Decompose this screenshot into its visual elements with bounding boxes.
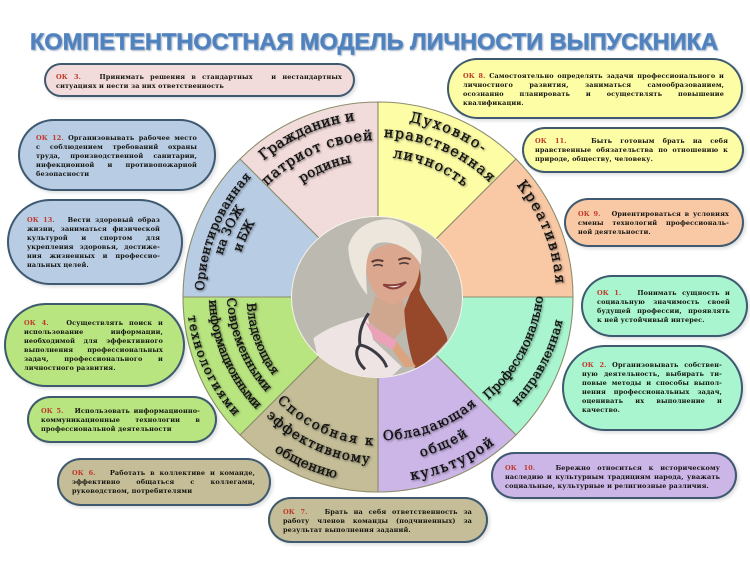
title: КОМПЕТЕНТНОСТНАЯ МОДЕЛЬ ЛИЧНОСТИ ВЫПУСКНИКА bbox=[30, 28, 718, 54]
callout: OK 12: с соблюдением требований охраны bbox=[36, 142, 197, 150]
callout: OK 1: к ней устойчивый интерес. bbox=[597, 316, 705, 324]
callout: OK 12: ОК 12. Организовывать рабочее место bbox=[36, 134, 197, 142]
callout: OK 4: необходимой для эффективного bbox=[24, 336, 163, 344]
callout: OK 2: нения профессиональных задач, bbox=[582, 388, 722, 396]
segment: general culture bbox=[378, 355, 517, 492]
segment: professionally oriented bbox=[436, 296, 574, 436]
segment: effective communication bbox=[239, 356, 379, 492]
callout: OK 1: будущей профессии, проявлять bbox=[597, 306, 730, 314]
segment: professionally oriented: направленная bbox=[512, 320, 565, 408]
callout: OK 5 bbox=[27, 396, 217, 443]
callout: OK 12: безопасности bbox=[36, 170, 89, 178]
segment: spiritual and moral personality: Духовно- bbox=[409, 111, 486, 152]
callout: OK 11: нравственные обязательства по отношению к bbox=[535, 146, 728, 154]
segment: citizen and patriot: Гражданин и bbox=[257, 112, 356, 162]
callout: OK 13: культурой и спортом для bbox=[27, 234, 160, 242]
callout: OK 7: работу членов команды (подчиненных) за bbox=[283, 517, 472, 525]
segment: citizen and patriot bbox=[239, 102, 378, 238]
callout: OK 9: ной деятельности. bbox=[578, 228, 651, 236]
segment: creative: Креативная bbox=[516, 178, 566, 285]
segment: effective communication: Способная к bbox=[278, 396, 375, 448]
segment: general culture: общей bbox=[420, 428, 470, 459]
callout: OK 4: задач, профессионального и bbox=[24, 354, 163, 362]
segment: information technologies: Современными bbox=[226, 298, 273, 394]
callout: OK 6: руководством, потребителями bbox=[72, 486, 192, 494]
callout: OK 1: социальную значимость своей bbox=[597, 298, 730, 306]
callout: OK 3: ситуациях и нести за них ответственность bbox=[56, 82, 224, 90]
segment: spiritual and moral personality bbox=[377, 102, 517, 238]
callout: OK 13 bbox=[7, 199, 183, 285]
segment: information technologies bbox=[182, 296, 318, 436]
segment: spiritual and moral personality: личность bbox=[392, 150, 468, 188]
segment: spiritual and moral personality: нравственная bbox=[384, 129, 496, 184]
callout: OK 4: использование информации, bbox=[24, 328, 163, 336]
segment: healthy lifestyle: на ЗОЖ bbox=[216, 204, 246, 257]
callout: OK 9: смены технологий профессиональ- bbox=[578, 218, 729, 226]
callout: OK 6 bbox=[57, 458, 271, 506]
competency wheel bbox=[31, 33, 720, 492]
callout: OK 8 bbox=[447, 58, 743, 119]
callout: OK 2: оценивать их выполнение и bbox=[582, 396, 722, 404]
callout: OK 4: ОК 4. Осуществлять поиск и bbox=[24, 318, 163, 326]
callout: OK 7: ОК 7. Брать на себя ответственность за bbox=[283, 508, 472, 516]
callout: OK 11 bbox=[522, 127, 744, 173]
callout: OK 12: инфекционной и противопожарной bbox=[36, 160, 197, 168]
callout: OK 4: личностного развития. bbox=[24, 364, 116, 372]
callout: OK 6: эффективно общаться с коллегами, bbox=[72, 478, 255, 486]
callout: OK 10: ОК 10. Бережно относиться к историческому bbox=[505, 464, 720, 472]
callout: OK 7: результат выполнения заданий. bbox=[283, 526, 411, 534]
segment: creative bbox=[436, 158, 574, 298]
callout: OK 2: качество. bbox=[582, 406, 620, 414]
segment: information technologies: информационными bbox=[208, 300, 263, 411]
segment: professionally oriented: Профессионально bbox=[482, 296, 546, 402]
photo of graduate bbox=[290, 215, 465, 383]
callout: OK 8: ОК 8. Самостоятельно определять задачи профессионального и bbox=[463, 72, 724, 80]
callout: OK 9: ОК 9. Ориентироваться в условиях bbox=[578, 210, 729, 218]
segment: healthy lifestyle: Ориентированная bbox=[194, 172, 253, 292]
callout: OK 2: ОК 2. Организовывать собствен- bbox=[582, 360, 722, 368]
callout: OK 12 bbox=[18, 119, 216, 191]
callout: OK 13: нальных целей. bbox=[27, 260, 89, 268]
callout: OK 9 bbox=[564, 198, 744, 247]
segment: citizen and patriot: родины bbox=[298, 155, 353, 188]
segment: information technologies: Владеющая bbox=[246, 302, 280, 377]
callout: OK 3: ОК 3. Принимать решения в стандартных и нестандартных bbox=[56, 72, 342, 80]
callout: OK 4: выполнения профессиональных bbox=[24, 346, 163, 354]
callout: OK 7 bbox=[268, 497, 488, 543]
segment: healthy lifestyle: и БЖ bbox=[234, 218, 257, 254]
callout: OK 8: квалификации. bbox=[463, 98, 524, 106]
segment: information technologies: технологиями bbox=[188, 315, 241, 418]
callout: OK 6: ОК 6. Работать в коллективе и команде, bbox=[72, 468, 255, 476]
callout: OK 13: жизни, заниматься физической bbox=[27, 224, 160, 232]
segment: general culture: культурой bbox=[410, 437, 496, 484]
callout: OK 3 bbox=[44, 63, 355, 97]
callout: OK 10: наследию и культурным традициям народа, уважать bbox=[505, 473, 720, 481]
callout: OK 10: социальные, культурные и религиозные различия. bbox=[505, 482, 709, 490]
callout: OK 2: повые методы и способы выпол- bbox=[582, 378, 722, 386]
callout: OK 5: коммуникационные технологии в bbox=[41, 416, 200, 424]
callout: OK 5: ОК 5. Использовать информационно- bbox=[41, 406, 200, 414]
segment: effective communication: эффективному bbox=[267, 412, 372, 468]
callout: OK 10 bbox=[491, 452, 737, 499]
callout: OK 11: природе, обществу, человеку. bbox=[535, 154, 653, 162]
callout: OK 4 bbox=[4, 303, 185, 387]
callout: OK 5: профессиональной деятельности bbox=[41, 424, 172, 432]
callout: OK 11: ОК 11. Быть готовым брать на себя bbox=[535, 136, 728, 144]
callout: OK 13: ния жизненных и профессио- bbox=[27, 252, 160, 260]
callout: OK 13: ОК 13. Вести здоровый образ bbox=[27, 216, 160, 224]
segment: healthy lifestyle bbox=[182, 158, 319, 298]
callout: OK 1: ОК 1. Понимать сущность и bbox=[597, 288, 730, 296]
callout: OK 12: труда, производственной санитарии, bbox=[36, 152, 197, 160]
callout: OK 1 bbox=[581, 275, 748, 337]
segment: general culture: Обладающая bbox=[383, 400, 478, 443]
segment: effective communication: общению bbox=[275, 446, 339, 480]
callout: OK 13: укрепления здоровья, достиже- bbox=[27, 242, 160, 250]
segment: citizen and patriot: патриот своей bbox=[262, 129, 374, 188]
callout: OK 2 bbox=[562, 345, 743, 431]
callout: OK 2: ную деятельность, выбирать ти- bbox=[582, 370, 722, 378]
callout: OK 8: личностного развития, заниматься самообразованием, bbox=[463, 80, 724, 88]
callout: OK 8: осознанно планировать и осуществлять повышение bbox=[463, 90, 724, 98]
